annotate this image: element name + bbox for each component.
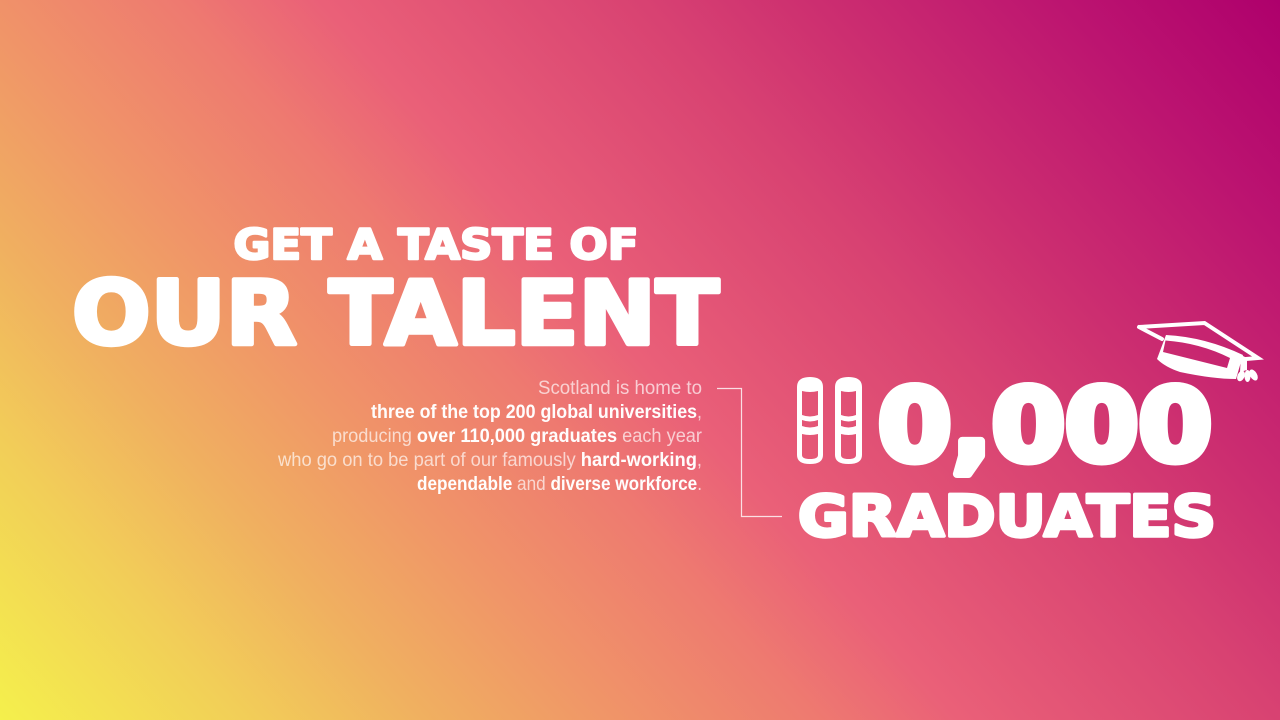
- icon: graduation cap: [1139, 323, 1260, 382]
- number: 0,000: 0,000: [878, 367, 1212, 484]
- label: graduates: GRADUATES: [798, 484, 1216, 550]
- heading line: get a taste of: GET A TASTE OF: [234, 220, 638, 269]
- body text: producing over 110,000 graduates each year: [332, 426, 703, 447]
- body text: three of the top 200 global universities,: [371, 402, 702, 423]
- icon: cap tassel: [1236, 355, 1260, 382]
- heading: [72, 220, 719, 365]
- body text: [277, 378, 703, 495]
- body text: dependable and diverse workforce.: [417, 474, 702, 495]
- body text: who go on to be part of our famously hard-working,: [277, 450, 702, 471]
- connector line: [717, 388, 782, 516]
- heading line: our talent: OUR TALENT: [72, 262, 719, 365]
- icon: rolled diploma scrolls forming 11: [797, 377, 862, 464]
- body text: Scotland is home to: [538, 378, 702, 399]
- stat: 110,000 graduates: [797, 323, 1260, 550]
